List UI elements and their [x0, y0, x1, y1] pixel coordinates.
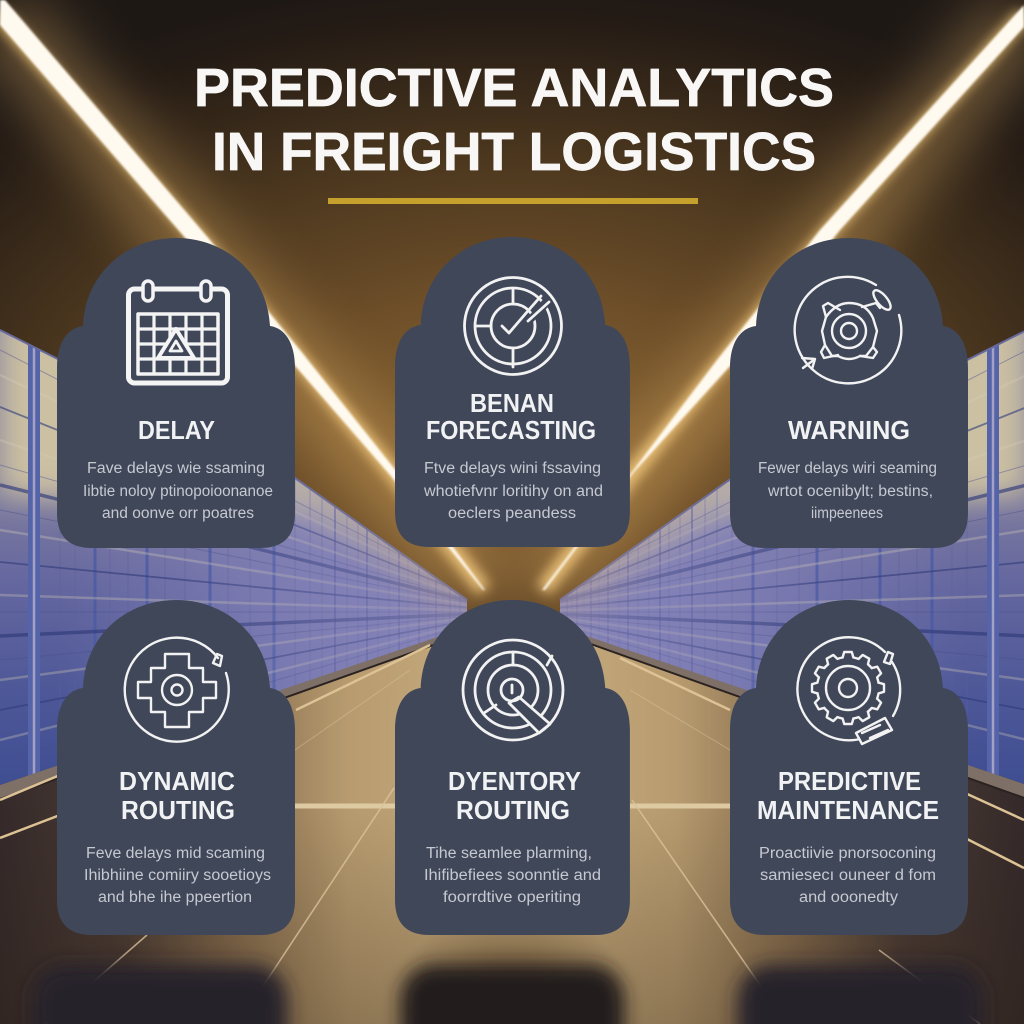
panel: forecasting: BENAN: [470, 388, 554, 418]
panel: dynamic routing: Feve delays mid scaming: [86, 845, 265, 862]
panel: warning: WARNING: [788, 415, 910, 445]
panel: warning: Fewer delays wiri seaming: [758, 460, 937, 477]
panel: delay: Iibtie noloy ptinopoioonanoe: [83, 483, 273, 500]
panel: delay: and oonve orr poatres: [102, 505, 254, 522]
panel: predictive maintenance: PREDICTIVE: [778, 766, 921, 796]
panel: delay: DELAY: [138, 415, 215, 445]
title: PREDICTIVE ANALYTICS: [194, 58, 834, 118]
icon: gear in circular arrow: [795, 277, 901, 383]
panel: predictive maintenance: MAINTENANCE: [757, 795, 939, 825]
title: [194, 58, 834, 182]
panel: delay: Fave delays wie ssaming: [87, 460, 265, 477]
panel: inventory routing: [395, 600, 630, 935]
panel: forecasting: whotiefvnr loritihy on and: [423, 483, 603, 500]
panel: warning: wrtot ocenibylt; bestins,: [767, 483, 933, 500]
title underline: [328, 198, 698, 204]
panel: inventory routing: DYENTORY: [448, 766, 581, 796]
panel: inventory routing: Ihifibefiees soonntie and: [424, 867, 601, 884]
panel: warning: iimpeenees: [811, 505, 883, 522]
panel: dynamic routing: Ihibhiine comiiry sooetioys: [84, 867, 271, 884]
panel: dynamic routing: and bhe ihe ppeertion: [98, 889, 252, 906]
panel: dynamic routing: [57, 600, 295, 935]
icon: gear with wrench: [797, 637, 900, 744]
panel: inventory routing: foorrdtive operiting: [443, 889, 581, 906]
panel: inventory routing: Tihe seamlee plarming,: [426, 845, 592, 862]
icon: radar with check: [464, 278, 562, 374]
panel: forecasting: Ftve delays wini fssaving: [424, 460, 601, 477]
title: IN FREIGHT LOGISTICS: [212, 122, 816, 182]
panel: warning: [730, 238, 968, 548]
panel: forecasting: oeclers peandess: [448, 505, 576, 522]
panel: delay: [57, 238, 295, 548]
icon: route cross with target: [125, 638, 229, 742]
panel: dynamic routing: ROUTING: [121, 795, 235, 825]
panel: predictive maintenance: samiesecı ouneer d fom: [760, 867, 936, 884]
panel: forecasting: [395, 237, 630, 547]
panel: predictive maintenance: Proactiivie pnorsoconing: [759, 845, 936, 862]
icon: calendar with warning triangle: [128, 281, 228, 383]
icon: target with pointer: [463, 640, 563, 740]
panel: dynamic routing: DYNAMIC: [119, 766, 235, 796]
panel: predictive maintenance: and ooonedty: [799, 889, 898, 906]
panel: inventory routing: ROUTING: [456, 795, 570, 825]
panel: predictive maintenance: [730, 600, 968, 935]
panel: forecasting: FORECASTING: [426, 415, 596, 445]
